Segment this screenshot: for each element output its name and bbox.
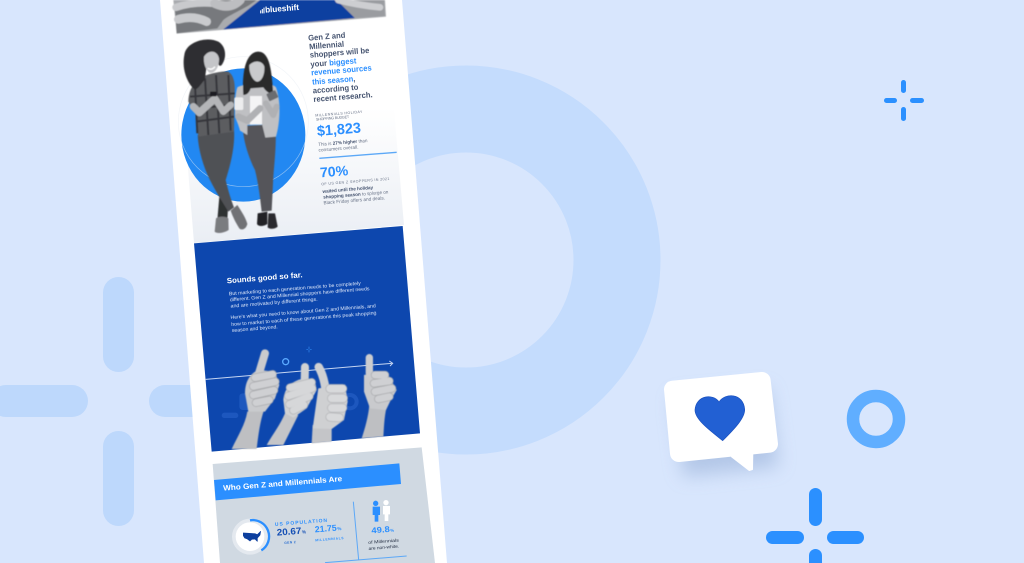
headline text: revenue sources [311,63,372,77]
panel body text: Here's what you need to know about Gen Z and Millennials, and [230,303,376,321]
panel: who Gen Z and Millennials are [213,447,435,563]
speech bubble [673,381,769,470]
infographic paper [160,0,447,563]
decorative top-right cross [884,80,924,121]
US population figures: MILLENNIALS [315,536,344,542]
stat: non-white millennials: % [390,528,394,533]
icon: heart [695,396,745,441]
stat: holiday budget: consumers overall. [318,144,359,153]
stat: non-white millennials [368,524,400,551]
stat: holiday budget: SHOPPING BUDGET [316,115,350,122]
stat: holiday budget: MILLENNIALS HOLIDAY [315,110,363,118]
decorative large ring [315,109,617,411]
US population figures: US POPULATION [275,518,328,528]
stat: non-white millennials: of Millennials [368,537,400,545]
US population figures: 20.67 [276,526,302,538]
hand four [362,358,397,438]
decorative bottom cross [766,488,864,563]
panel body text: and are motivated by different things. [230,297,318,310]
panel body text: But marketing to each generation needs to be completely [229,281,362,297]
headline text: shoppers will be [309,46,370,60]
panel body text: how to market to each of these generations this peak shopping [231,310,377,328]
faint background shapes [222,393,357,418]
stat: 70 percent: OF US GEN Z SHOPPERS IN 2021 [321,177,390,186]
shopper one [184,39,247,233]
panel body text [229,281,377,334]
US population figures: % [337,526,342,531]
headline text: recent research. [313,90,373,104]
section title bar: Who Gen Z and Millennials Are [223,474,342,493]
hero photo: two shoppers on blue circle [178,39,308,233]
chat bubble with heart [673,381,778,477]
stat: 70 percent [319,162,390,205]
stat: non-white millennials: 49.8 [371,524,391,535]
logo: blueshift [265,2,300,15]
stat: 70 percent: Black Friday offers and deals. [323,195,385,205]
headline and stats [308,31,397,205]
panel body text: different. Gen Z and Millennial shoppers have different needs [230,286,370,303]
US population donut [232,519,269,555]
headline text: according to [312,83,359,95]
decorative left cross [0,277,219,526]
US population figures: % [302,529,307,535]
stat: holiday budget: This is 27% higher than [318,138,368,147]
headline text: this season, [312,74,356,87]
stat: non-white millennials: are non-white. [368,544,399,551]
dividers [325,502,407,563]
stat: 70 percent: shopping season to splurge on [323,189,389,200]
US population figures: 21.75 [314,523,337,534]
people icons [373,500,390,522]
headline text [308,31,373,104]
section title bar [214,463,401,500]
stat: holiday budget [315,110,368,153]
panel heading: Sounds good so far. [226,270,303,285]
headline text: your biggest [310,56,357,69]
blue circle [181,68,305,202]
headline text: Gen Z and [308,31,346,43]
panel: sounds good [194,226,420,452]
headline text: Millennial [309,40,344,51]
header image with logo [173,0,386,34]
US population figures [275,518,344,545]
map of USA [243,531,261,541]
stat: 70 percent: 70% [319,162,349,180]
hand one [232,353,279,449]
panel body text: season and beyond. [232,324,278,334]
thumbs up hands [232,353,397,449]
small ring [283,359,289,365]
shopper two [234,52,279,229]
US population figures: GEN Z [284,540,296,545]
stat: holiday budget: $1,823 [316,121,362,140]
upward arrow line [206,361,393,379]
hand two [267,367,317,445]
hand three [312,367,348,443]
stat: 70 percent: waited until the holiday [321,185,374,194]
sparkle [306,347,312,352]
decorative ring [853,396,899,442]
